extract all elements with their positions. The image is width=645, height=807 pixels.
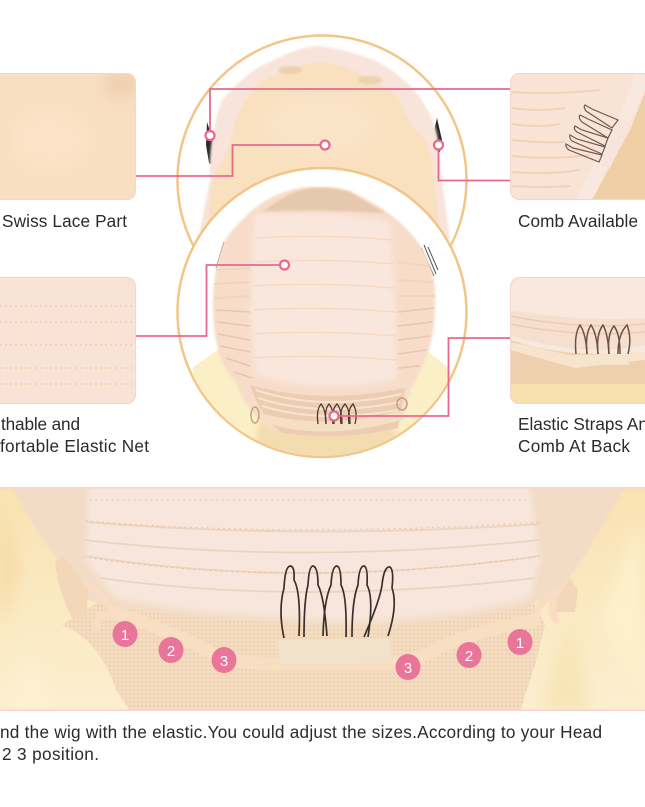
cap [12,487,625,627]
icon: comb teeth [281,566,394,638]
panel: comb available closeup [510,73,645,200]
number badges [112,621,532,680]
photo: back of wig with adjustable strap [0,487,645,711]
label: elastic net [0,414,149,456]
number badges: 3 [404,660,412,677]
top lace [262,188,385,213]
cap ruching [84,522,540,592]
cap [213,187,435,436]
icon: comb base [277,638,391,664]
circle: inside of wig cap [178,168,470,470]
icon: comb [566,105,618,162]
number badges: 3 [220,653,228,670]
label: elastic net: thable and [1,414,80,434]
icon: strap tabs [55,556,88,618]
panel: elastic straps closeup [510,277,645,404]
icon: side combs [216,242,438,276]
icon: hooks [251,398,407,423]
label: comb available: Comb Available [518,211,638,231]
panel: elastic net closeup [0,277,136,404]
elastic strap [111,612,540,664]
net base [62,595,545,711]
number badges: 2 [167,643,175,660]
label: elastic net: fortable Elastic Net [0,436,149,456]
panel: swiss lace closeup [0,70,142,200]
icon: back comb [317,404,356,424]
caption [0,722,602,764]
lace triangle [592,92,645,200]
callout dots [206,131,443,420]
callout lines [136,89,510,416]
label: elastic straps [518,414,645,456]
number badges: 1 [121,627,129,644]
icon: comb [576,325,630,354]
icon: side combs [206,118,442,165]
label: elastic straps: Comb At Back [518,436,630,456]
label: swiss lace part: Swiss Lace Part [2,211,127,231]
icon: right hook [537,590,558,620]
side ruching [216,308,434,378]
icon: left hook [86,584,112,628]
caption: nd the wig with the elastic.You could adjust the sizes.According to your Head [0,722,602,742]
centre panel [250,213,397,386]
number badges: 2 [465,648,473,665]
caption: 2 3 position. [2,744,99,764]
number badges: 1 [516,635,524,652]
back strap area [250,385,405,437]
circle: front of wig [176,34,468,246]
hair [192,350,448,456]
